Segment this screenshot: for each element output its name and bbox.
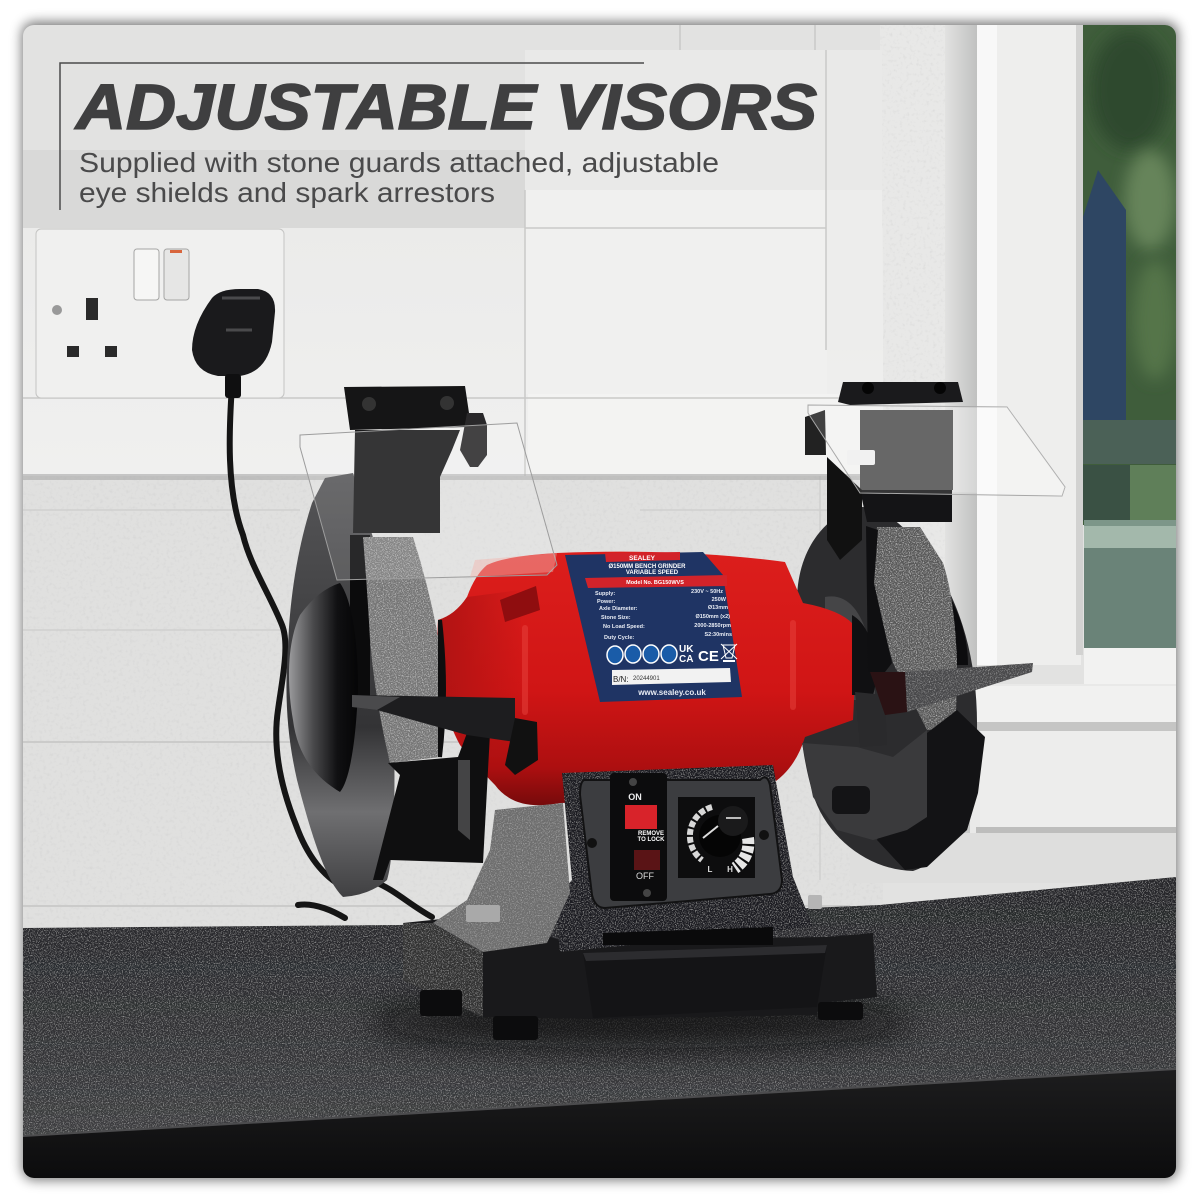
- spec rows: Duty Cycle:: [604, 635, 634, 641]
- rating label: Ø150MM BENCH GRINDER: [608, 564, 686, 570]
- power cable: [230, 385, 432, 918]
- left tool rest: [352, 695, 515, 742]
- batch number box: B/N:: [613, 675, 629, 684]
- motor: [438, 552, 854, 805]
- spec rows: S2:30mins: [704, 632, 732, 638]
- spec rows: 250W: [712, 597, 727, 603]
- batch number box: 20244901: [633, 676, 660, 682]
- rocker switch: REMOVE: [638, 831, 664, 837]
- left wheel cap: [289, 583, 358, 792]
- left lower bracket: [373, 733, 490, 880]
- subtitle: [79, 147, 719, 208]
- conformity marks: CE: [698, 648, 719, 665]
- left grinding stone: [363, 537, 440, 763]
- spec rows: 230V ~ 50Hz: [691, 589, 723, 595]
- bench top: [23, 877, 1176, 1178]
- base casting: [403, 915, 877, 1019]
- spec rows: Ø13mm: [708, 605, 728, 611]
- right grinding stone: [873, 527, 957, 730]
- right wheel disc and hub: [796, 507, 977, 871]
- spec rows: No Load Speed:: [603, 624, 645, 630]
- right wheel assembly: [802, 382, 1033, 870]
- rating label: SEALEY: [629, 555, 656, 562]
- spec rows: Stone Size:: [601, 615, 631, 621]
- spec rows: Supply:: [595, 591, 615, 597]
- foliage: [1080, 25, 1177, 525]
- right hub ring: [852, 615, 876, 695]
- safety icons: [607, 645, 677, 664]
- rating label: VARIABLE SPEED: [626, 570, 679, 576]
- left wheel assembly: [286, 386, 538, 897]
- conformity marks: [679, 644, 738, 662]
- speed dial: [678, 797, 755, 878]
- spec rows: Power:: [597, 599, 616, 605]
- subtitle: Supplied with stone guards attached, adjustable: [79, 147, 719, 178]
- window sill: [970, 797, 977, 833]
- plug: [192, 289, 275, 398]
- left backing disc: [286, 473, 394, 897]
- right clear visor: [808, 405, 1065, 496]
- batch number box: [612, 668, 731, 685]
- base: [403, 765, 877, 1040]
- pedestal: [433, 803, 570, 952]
- control panel: [580, 773, 782, 908]
- spec rows: 2000-2850rpm: [694, 623, 731, 629]
- right guard post: [862, 490, 952, 522]
- right lower guard: [877, 710, 985, 870]
- window frame: [1084, 520, 1176, 526]
- window: [956, 25, 1176, 855]
- rocker switch: OFF: [636, 871, 654, 881]
- heading: [60, 63, 817, 210]
- bolts and feet: [420, 895, 863, 1040]
- rating label: www.sealey.co.uk: [637, 688, 706, 697]
- spec rows: Ø150mm (x2): [695, 614, 730, 620]
- motor body: [438, 552, 854, 805]
- speed dial: L: [708, 865, 713, 874]
- left clear visor: [300, 423, 557, 580]
- title: ADJUSTABLE VISORS: [74, 71, 817, 143]
- tray: [583, 927, 827, 1018]
- rocker switch: TO LOCK: [638, 837, 665, 843]
- conformity marks: CA: [679, 654, 693, 665]
- spec rows: [595, 589, 732, 641]
- heading frame: [60, 63, 644, 210]
- wall socket: [36, 229, 284, 398]
- cable trunking: [23, 25, 883, 480]
- spec rows: Axle Diameter:: [599, 606, 638, 612]
- rocker switches: [134, 249, 189, 300]
- rocker switch: [610, 773, 667, 901]
- right arm plate: [802, 730, 927, 840]
- right tool rest: [905, 663, 1033, 712]
- subtitle: eye shields and spark arrestors: [79, 177, 495, 208]
- speed dial: H: [727, 865, 733, 874]
- motor support: [555, 765, 813, 952]
- conformity marks: UK: [679, 644, 694, 655]
- rating label: [565, 552, 742, 702]
- left guard post: [353, 430, 460, 533]
- rating label: Model No. BG150WVS: [626, 580, 684, 586]
- rocker switch: ON: [628, 792, 642, 802]
- socket holes: [52, 298, 117, 357]
